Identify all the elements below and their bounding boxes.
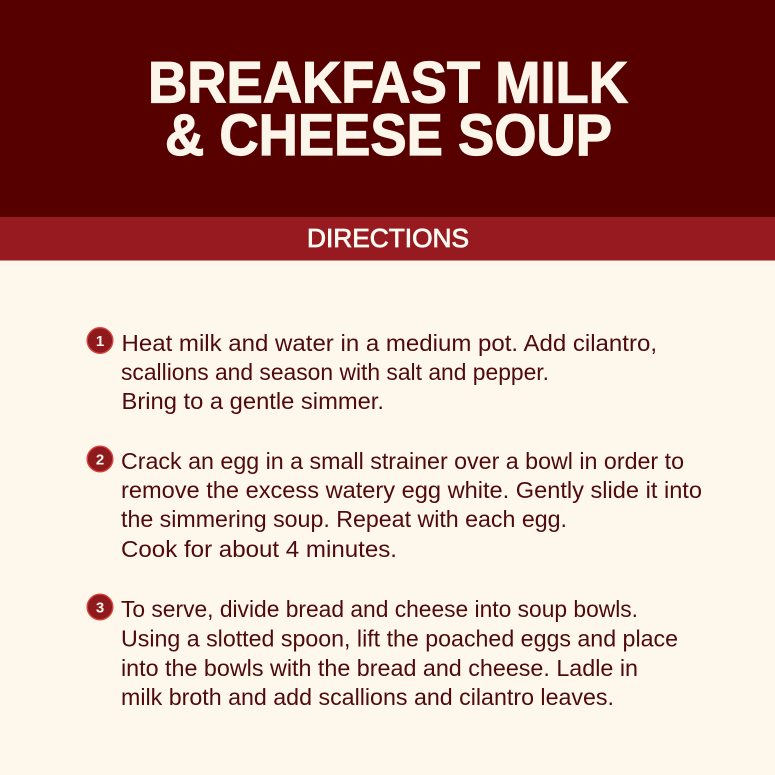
- step 3 text: To serve, divide bread and cheese into soup bowls.: [121, 596, 638, 622]
- directions heading: DIRECTIONS: [307, 225, 469, 253]
- title: [148, 50, 628, 168]
- header panel: [0, 0, 775, 217]
- step 2 text: remove the excess watery egg white. Gently slide it into: [121, 477, 702, 503]
- step 2 text: [121, 448, 702, 562]
- badge 2: [87, 446, 113, 472]
- step 1: [87, 328, 657, 414]
- badge 1: 1: [96, 333, 104, 350]
- step 3: [87, 594, 678, 710]
- step 3 text: Using a slotted spoon, lift the poached eggs and place: [121, 626, 678, 652]
- title: BREAKFAST MILK: [148, 50, 628, 116]
- step 2 text: Cook for about 4 minutes.: [121, 536, 397, 562]
- step 2 text: Crack an egg in a small strainer over a bowl in order to: [121, 448, 684, 474]
- step 2: [87, 446, 702, 562]
- step 2 text: the simmering soup. Repeat with each egg.: [121, 506, 567, 532]
- badge 3: [87, 594, 113, 620]
- step 1 text: Bring to a gentle simmer.: [122, 388, 384, 414]
- directions band: [0, 217, 775, 260]
- step 3 text: into the bowls with the bread and cheese. Ladle in: [121, 655, 638, 681]
- badge 1: [87, 328, 113, 353]
- step 3 text: [121, 596, 678, 710]
- step 3 text: milk broth and add scallions and cilantro leaves.: [121, 684, 614, 710]
- badge 2: 2: [96, 452, 104, 468]
- step 1 text: Heat milk and water in a medium pot. Add cilantro,: [122, 330, 657, 356]
- step 1 text: [121, 330, 657, 414]
- title: & CHEESE SOUP: [165, 103, 612, 168]
- step 1 text: scallions and season with salt and pepper.: [121, 359, 549, 385]
- badge 3: 3: [96, 600, 104, 616]
